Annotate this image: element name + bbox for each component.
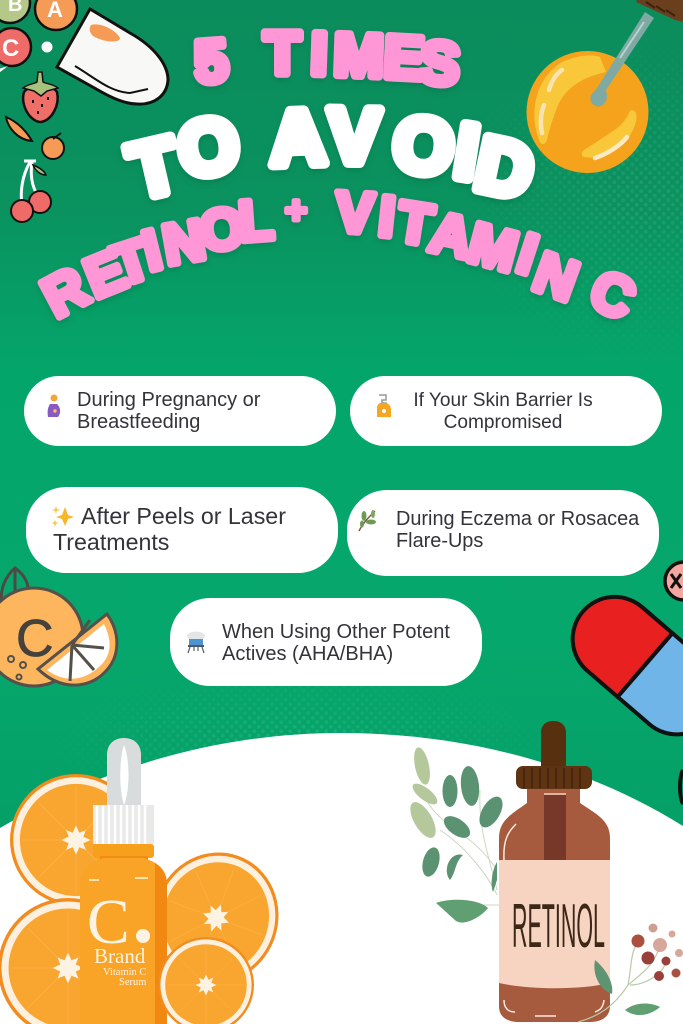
- icon: pump bottle: [377, 394, 391, 417]
- text: eczema: [396, 508, 640, 552]
- title line: TO AVOID: TOAVOID: [121, 93, 541, 216]
- text: skin barrier: [413, 390, 593, 432]
- text: eczema: During Eczema or Rosacea: [396, 508, 639, 530]
- title line: VITAMIN C: VITAMINC: [334, 180, 644, 333]
- icon: vitamins and fruit cluster: C: [2, 35, 19, 62]
- icon: orange with letter C and slice: C: [16, 610, 54, 668]
- title: [32, 20, 644, 333]
- text: actives: When Using Other Potent: [222, 621, 450, 643]
- card: During Pregnancy or Breastfeeding: [24, 376, 336, 446]
- label: vitamin C text: [87, 886, 150, 988]
- card: When Using Other Potent Actives: [170, 598, 482, 686]
- text: actives: Actives (AHA/BHA): [222, 642, 393, 664]
- illustration: berry sprig: [578, 924, 683, 1022]
- text: skin barrier: If Your Skin Barrier Is: [413, 390, 593, 411]
- title line: RETINOL: RETINOL: [32, 188, 276, 330]
- label: vitamin C text: Brand: [94, 944, 146, 968]
- illustration: front orange slice: [158, 937, 254, 1024]
- title plus sign: +: [285, 190, 307, 232]
- label: vitamin C text: C: [87, 886, 130, 957]
- card: If Your Skin Barrier Is Compromised: [350, 376, 662, 446]
- text: actives: [222, 621, 450, 664]
- icon: honey drop with dropper: [526, 0, 683, 173]
- card: During Eczema or Rosacea Flare-Ups: [347, 490, 659, 576]
- text: eczema: Flare-Ups: [396, 530, 483, 552]
- icon: orange with letter C and slice: [0, 568, 117, 686]
- text: pregnancy: [77, 389, 260, 432]
- text: peels: Treatments: [53, 529, 169, 555]
- text: pregnancy: Breastfeeding: [77, 410, 200, 432]
- icon: capsule pill: [555, 562, 683, 804]
- icon: pregnant woman: [48, 394, 60, 417]
- label: vitamin C text: Serum: [119, 977, 146, 988]
- illustration: orange slices: [0, 774, 297, 1024]
- card: After Peels or Laser Treatments: [26, 487, 338, 573]
- icon: vitamins and fruit cluster: [0, 0, 168, 222]
- white curved base: [0, 733, 683, 1024]
- illustration: vitamin C serum bottle: [80, 738, 167, 1024]
- text: peels: After Peels or Laser: [81, 503, 286, 529]
- icon: sparkles: [52, 506, 74, 527]
- text: peels: [53, 503, 286, 555]
- text: pregnancy: During Pregnancy or: [77, 389, 260, 411]
- illustration: retinol bottle: [495, 721, 615, 1024]
- illustration: green leaves: [405, 746, 507, 923]
- icon: herb sprig: [358, 510, 376, 532]
- text: skin barrier: Compromised: [444, 412, 562, 432]
- title line: 5 TIMES: 5TIMES: [192, 20, 463, 98]
- icon: blue chair: [187, 632, 205, 654]
- label: vitamin C text: Vitamin C: [103, 967, 146, 978]
